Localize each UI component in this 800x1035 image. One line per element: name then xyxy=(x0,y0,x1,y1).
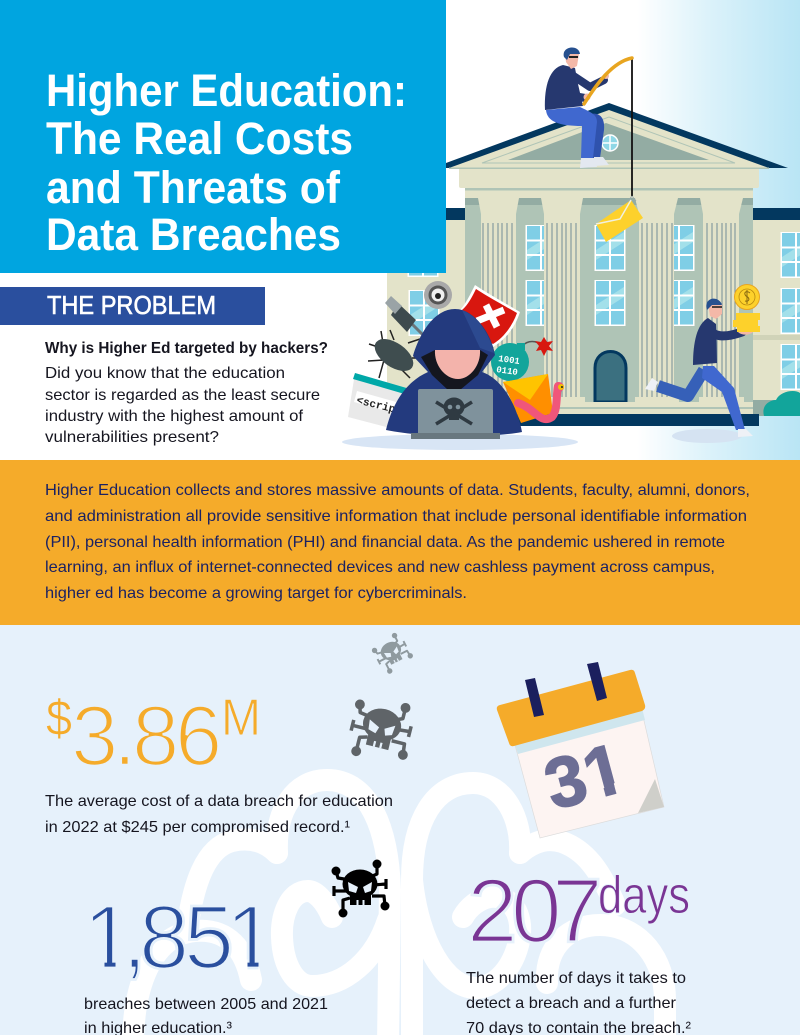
stat: $3.86M: $ xyxy=(46,690,72,746)
ground shadow xyxy=(342,434,578,450)
icon: worm xyxy=(518,382,564,419)
icon: bomb: 1001 xyxy=(498,354,521,367)
stat text: breaches: breaches between 2005 and 2021 xyxy=(84,996,328,1013)
steps and foundation xyxy=(446,402,753,415)
problem text block: Did you know that the education xyxy=(45,365,285,382)
stat: $3.86M: 3.86 xyxy=(71,689,222,784)
icon: faint grey virus skull xyxy=(369,630,416,677)
wall xyxy=(465,198,753,402)
columns xyxy=(476,198,744,403)
head xyxy=(708,304,722,319)
thief near leg xyxy=(546,107,597,158)
stat text: average cost: The average cost of a data breach for education xyxy=(45,793,393,810)
fishing line xyxy=(631,58,633,196)
problem text block: Why is Higher Ed targeted by hackers? xyxy=(45,340,328,357)
shoes xyxy=(580,157,609,168)
orange band xyxy=(0,460,800,625)
title: and Threats of xyxy=(46,162,341,213)
icon: red shield xyxy=(460,285,520,347)
title panel xyxy=(0,0,446,273)
title: Data Breaches xyxy=(46,209,341,260)
stat text: days to detect: detect a breach and a further xyxy=(466,995,677,1012)
intro paragraph: (PII), personal health information (PHI) and financial data. As the pandemic ushered in remote xyxy=(45,534,725,551)
gold coin xyxy=(734,284,760,310)
pediment window xyxy=(602,135,618,151)
problem text block: sector is regarded as the least secure xyxy=(45,387,320,404)
icon: webcam xyxy=(424,281,452,309)
stats panel background xyxy=(0,625,800,1035)
bush xyxy=(763,391,800,416)
stat: 1,851: 1,851 xyxy=(83,888,276,988)
calendar date: 31 xyxy=(537,729,633,825)
title xyxy=(46,65,407,260)
icon: black virus skull xyxy=(332,860,390,918)
intro paragraph xyxy=(45,482,750,602)
heading bar: the problem: THE PROBLEM xyxy=(47,290,216,320)
icon: bomb xyxy=(491,337,553,381)
fishing rod xyxy=(584,58,632,104)
icon: script window xyxy=(348,373,410,430)
page fold xyxy=(638,779,664,813)
title: Higher Education: xyxy=(46,65,407,116)
background white swirl xyxy=(133,780,665,1035)
intro paragraph: and administration all provide sensitive information that include personal identifiable information xyxy=(45,508,747,525)
illustration: running thief with coins xyxy=(645,284,760,443)
door xyxy=(595,352,626,402)
envelope lure xyxy=(596,196,643,242)
intro paragraph: Higher Education collects and stores massive amounts of data. Students, faculty, alumni, donors, xyxy=(45,482,750,499)
calendar rings xyxy=(525,662,607,717)
illustration background: sky gradient xyxy=(446,0,800,460)
illustration: thief fishing from roof xyxy=(545,48,643,242)
calendar strip xyxy=(515,708,645,754)
wing windows xyxy=(408,231,800,390)
illustration: university building xyxy=(387,103,800,426)
stat text: days to detect xyxy=(466,970,692,1035)
stat text: days to detect: The number of days it takes to xyxy=(466,970,686,987)
shoes xyxy=(645,378,753,437)
laptop xyxy=(411,389,500,439)
problem text block xyxy=(45,340,328,446)
thief arms xyxy=(560,71,604,98)
intro paragraph: learning, an influx of internet-connected devices and new cashless payment across campus, xyxy=(45,559,715,576)
icon: script window: <scrip xyxy=(355,395,397,417)
entablature xyxy=(459,168,759,188)
front leg xyxy=(702,366,745,430)
thief far leg xyxy=(590,114,604,158)
stat: 207 days xyxy=(467,861,690,962)
back leg xyxy=(658,370,704,396)
calendar header xyxy=(497,670,645,746)
hacker hooded body xyxy=(386,309,522,436)
stat: $3.86M: M xyxy=(221,689,261,747)
thief head xyxy=(565,54,579,69)
intro paragraph: higher ed has become a growing target for cybercriminals. xyxy=(45,585,467,602)
thief hands xyxy=(603,73,609,79)
stat: 207 days: days xyxy=(598,866,690,925)
problem text block: vulnerabilities present? xyxy=(45,429,219,446)
icon: usb cable xyxy=(385,296,426,338)
problem text block: industry with the highest amount of xyxy=(45,408,304,425)
hood opening xyxy=(421,350,488,390)
calendar icon xyxy=(497,662,664,838)
central windows xyxy=(526,225,694,326)
arm xyxy=(706,326,742,336)
stat text: average cost xyxy=(45,793,393,836)
right wing xyxy=(753,220,800,415)
torso xyxy=(693,318,717,365)
icon: orange envelope xyxy=(503,374,553,423)
calendar page xyxy=(515,712,664,838)
stat text: average cost: in 2022 at $245 per compromised record.¹ xyxy=(45,819,350,836)
thief torso xyxy=(545,65,583,110)
left wing xyxy=(387,220,465,420)
icon: bug xyxy=(368,330,422,378)
icon: grey virus skull xyxy=(343,691,420,768)
face xyxy=(435,350,480,379)
heading bar: the problem xyxy=(0,287,265,325)
pediment xyxy=(446,103,788,168)
coin stack xyxy=(733,313,760,332)
title: The Real Costs xyxy=(46,113,353,164)
stat text: breaches xyxy=(84,996,328,1035)
shadow xyxy=(672,429,742,443)
laptop skull xyxy=(436,398,472,424)
stat: 207 days: 207 xyxy=(467,861,603,962)
illustration: hacker with laptop and threat icons xyxy=(342,281,578,450)
icon: bomb: 0110 xyxy=(496,365,518,378)
